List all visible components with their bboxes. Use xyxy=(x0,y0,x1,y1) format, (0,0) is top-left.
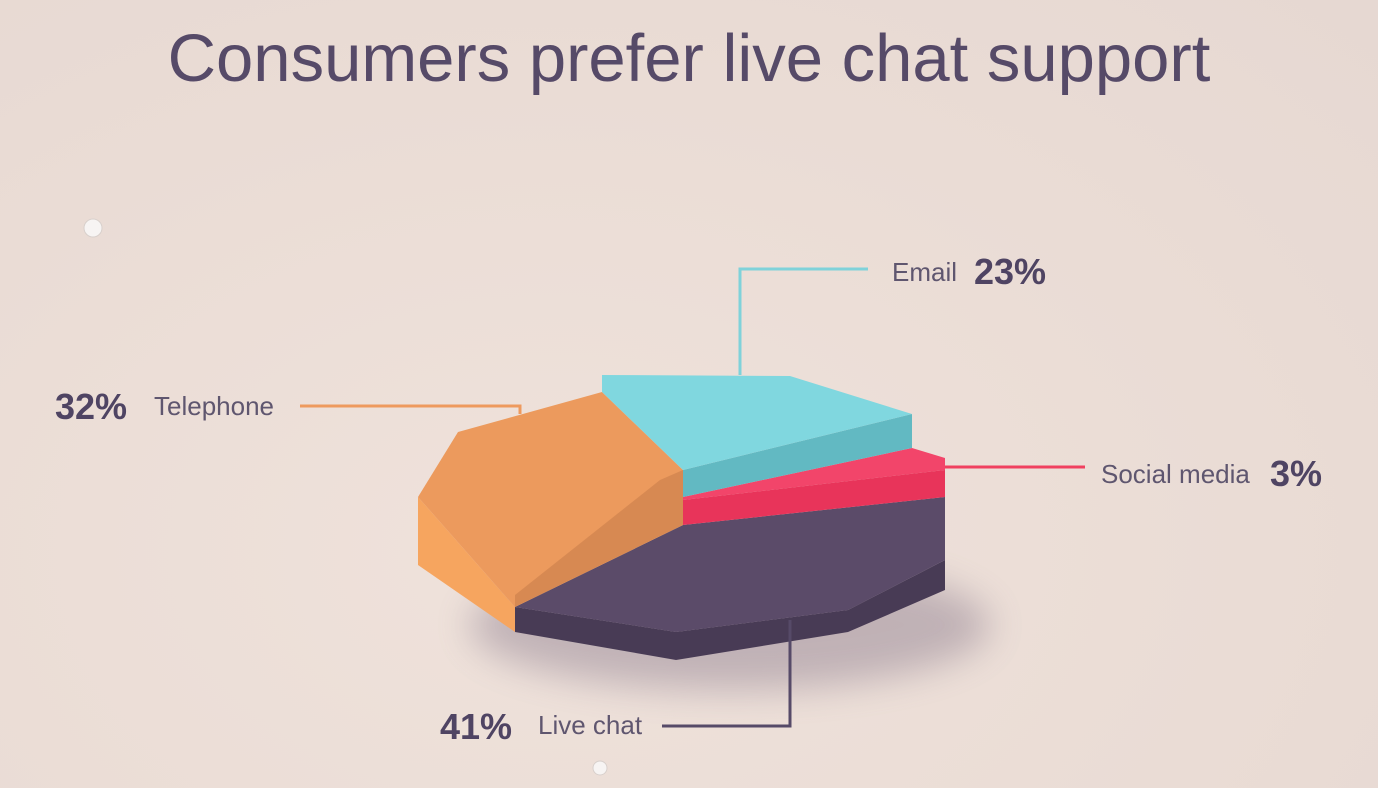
callout: telephone xyxy=(55,386,520,427)
slice: live chat xyxy=(515,497,945,660)
slice: email xyxy=(602,375,912,497)
callout: email: Email xyxy=(892,257,957,287)
pie chart xyxy=(418,375,945,660)
callout: live chat: Live chat xyxy=(538,710,643,740)
callout: telephone: 32% xyxy=(55,386,127,427)
slice: social media xyxy=(683,448,945,525)
callout: live chat: 41% xyxy=(440,706,512,747)
title: Consumers prefer live chat support xyxy=(168,21,1210,96)
callout: social media: 3% xyxy=(1270,453,1322,494)
callout: email: 23% xyxy=(974,251,1046,292)
callout: live chat xyxy=(440,620,790,747)
decorative gem dots xyxy=(84,219,607,775)
slice: telephone xyxy=(418,392,683,632)
pie shadow xyxy=(470,560,990,690)
callout: social media xyxy=(945,453,1322,494)
callout: telephone: Telephone xyxy=(154,391,274,421)
callout: social media: Social media xyxy=(1101,459,1250,489)
callout: email xyxy=(740,251,1046,375)
